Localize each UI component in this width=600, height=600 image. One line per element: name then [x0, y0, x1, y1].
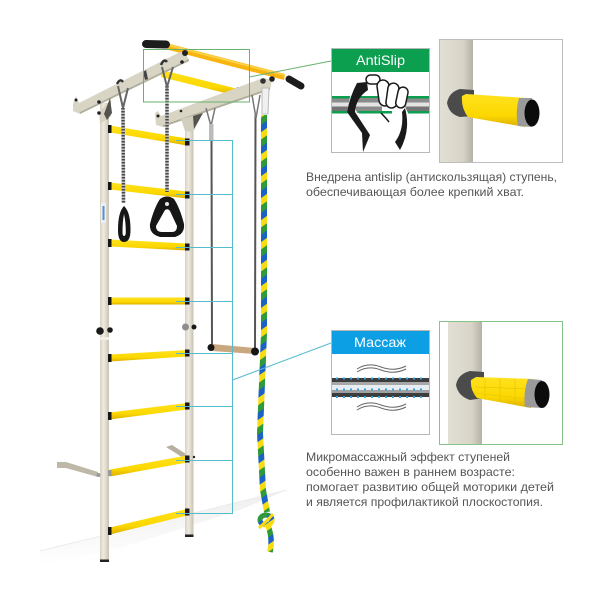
finger two	[385, 82, 400, 109]
finger three	[395, 86, 409, 109]
massage rung	[471, 377, 534, 408]
left ring	[118, 206, 130, 242]
massage bar	[332, 378, 429, 382]
brand sticker	[101, 203, 106, 223]
wall bars frame	[57, 44, 301, 562]
massage label: Массаж	[354, 334, 407, 350]
triangle ring	[150, 196, 184, 237]
left upright	[100, 103, 109, 561]
massage collar	[524, 379, 542, 408]
yellow rung	[462, 94, 527, 127]
massage rung end	[534, 381, 550, 408]
floor line	[40, 490, 287, 566]
trapeze swing	[206, 95, 260, 356]
second yellow bar	[161, 70, 238, 96]
finger one	[376, 79, 392, 107]
massage description: и является профилактикой плоскостопия.	[306, 495, 543, 509]
rope knot	[260, 515, 272, 525]
black hand shadow	[347, 82, 370, 152]
palm	[347, 80, 408, 152]
massage description: помогает развитию общей моторики детей	[306, 480, 554, 494]
AntiSlip header	[332, 49, 429, 72]
panel: antislip rung photo	[440, 40, 562, 162]
icon: fist	[347, 75, 409, 152]
gymnastic rings with chains	[117, 61, 184, 242]
bar through palm	[352, 98, 382, 113]
right gusset	[181, 113, 203, 132]
bracket bolts	[96, 473, 100, 477]
right grip	[289, 79, 301, 86]
climbing rope	[259, 88, 273, 552]
palm edge	[395, 108, 407, 150]
right upright	[185, 113, 194, 536]
panel: massage rung photo	[440, 322, 562, 444]
massage description: особенно важен в раннем возрасте:	[306, 465, 515, 479]
left top beam	[73, 51, 189, 114]
right chain	[165, 86, 169, 192]
antislip description	[306, 170, 557, 199]
massage description: Микромассажный эффект ступеней	[306, 450, 510, 464]
massage socket	[456, 371, 484, 400]
green callout box	[144, 50, 331, 102]
rung end	[524, 100, 540, 126]
yellow rungs	[108, 125, 190, 535]
teal callout bracket	[176, 140, 331, 514]
bar	[332, 96, 429, 98]
thumb	[366, 75, 380, 84]
antislip description: обеспечивающая более крепкий хват.	[306, 185, 524, 199]
bolts	[97, 100, 101, 104]
massage description	[306, 450, 554, 509]
panel: AntiSlip badge	[332, 48, 430, 152]
AntiSlip label: AntiSlip	[356, 52, 405, 68]
thumb heel	[381, 113, 389, 122]
metal collar	[517, 98, 532, 127]
rung socket	[447, 89, 474, 117]
upper pull-up bar	[167, 44, 285, 80]
left gusset	[99, 100, 111, 124]
antislip description: Внедрена antislip (антискользящая) ступень,	[306, 170, 557, 184]
joints	[96, 327, 104, 335]
back-left wall bracket	[57, 462, 98, 477]
waves	[357, 365, 406, 410]
left grip	[146, 40, 166, 48]
panel: massage badge	[332, 330, 430, 434]
left chain	[121, 108, 125, 203]
right top beam	[155, 78, 272, 127]
back-right wall bracket	[166, 445, 186, 459]
massage header	[332, 331, 429, 354]
swing bar	[212, 344, 255, 354]
